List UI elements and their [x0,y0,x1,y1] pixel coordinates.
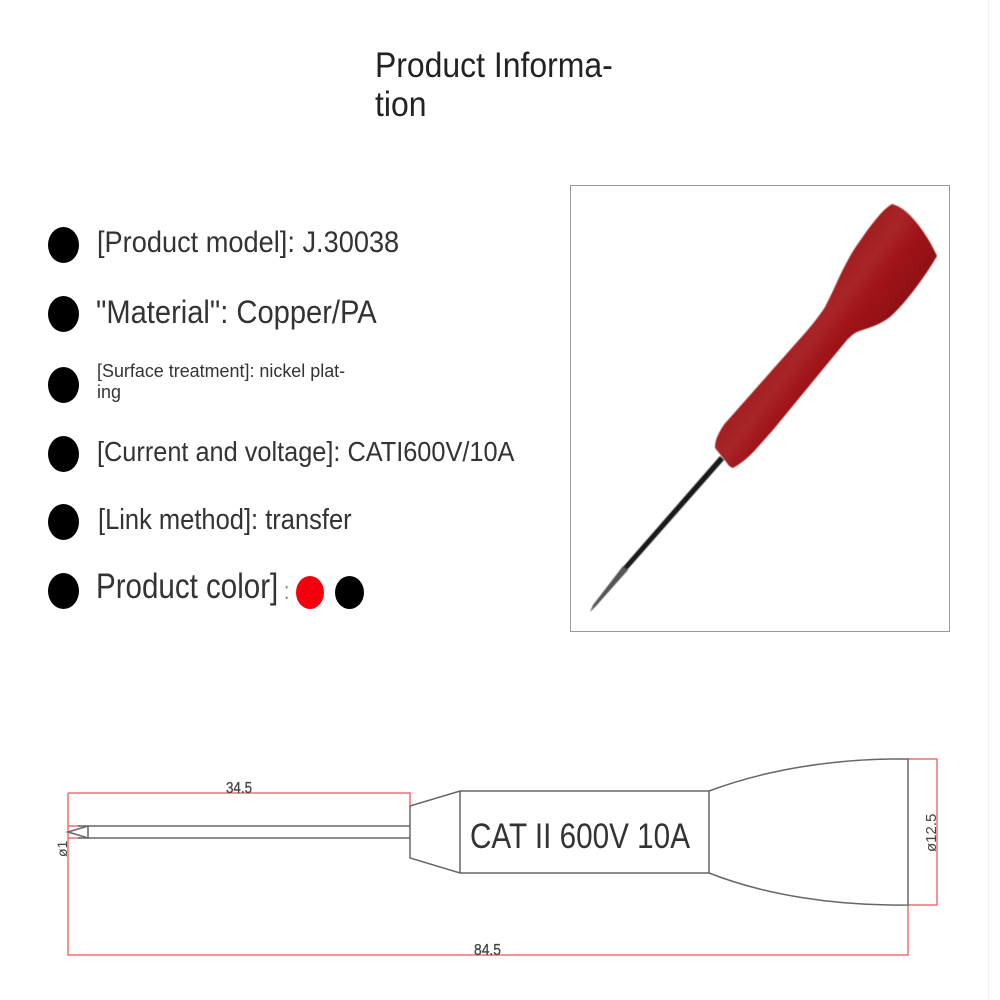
spec row: link method: [Link method]: transfer [98,504,352,536]
spec row: product color: Product color] [96,567,278,606]
product photo panel [570,185,950,632]
spec row: surface treatment [48,361,345,403]
spec row: material: "Material": Copper/PA [96,294,377,330]
dimension label: diameter 12.5: ø12.5 [923,814,940,852]
title: Product Informa- [375,46,613,85]
spec row: current and voltage: [Current and voltage]: CATI600V/10A [97,436,514,467]
faint colon: : [284,578,289,605]
rating label: CAT II 600V 10A [470,817,691,856]
dimension label: 34.5: 34.5 [226,780,252,797]
probe outline [68,759,908,905]
spec row: product color [48,567,364,609]
dimension lines [68,759,937,955]
spec row: surface treatment: ing [97,382,121,402]
color swatch: red [296,576,324,609]
page edge [988,0,989,1000]
dimension label: diameter 1: ø1 [54,840,70,857]
spec row: surface treatment: [Surface treatment]: nickel plat- [97,361,345,381]
spec row: product model: [Product model]: J.30038 [97,226,399,259]
dimension label: 84.5: 84.5 [474,942,501,959]
title: tion [375,85,426,124]
color swatch: black [335,576,364,609]
title [375,46,613,124]
